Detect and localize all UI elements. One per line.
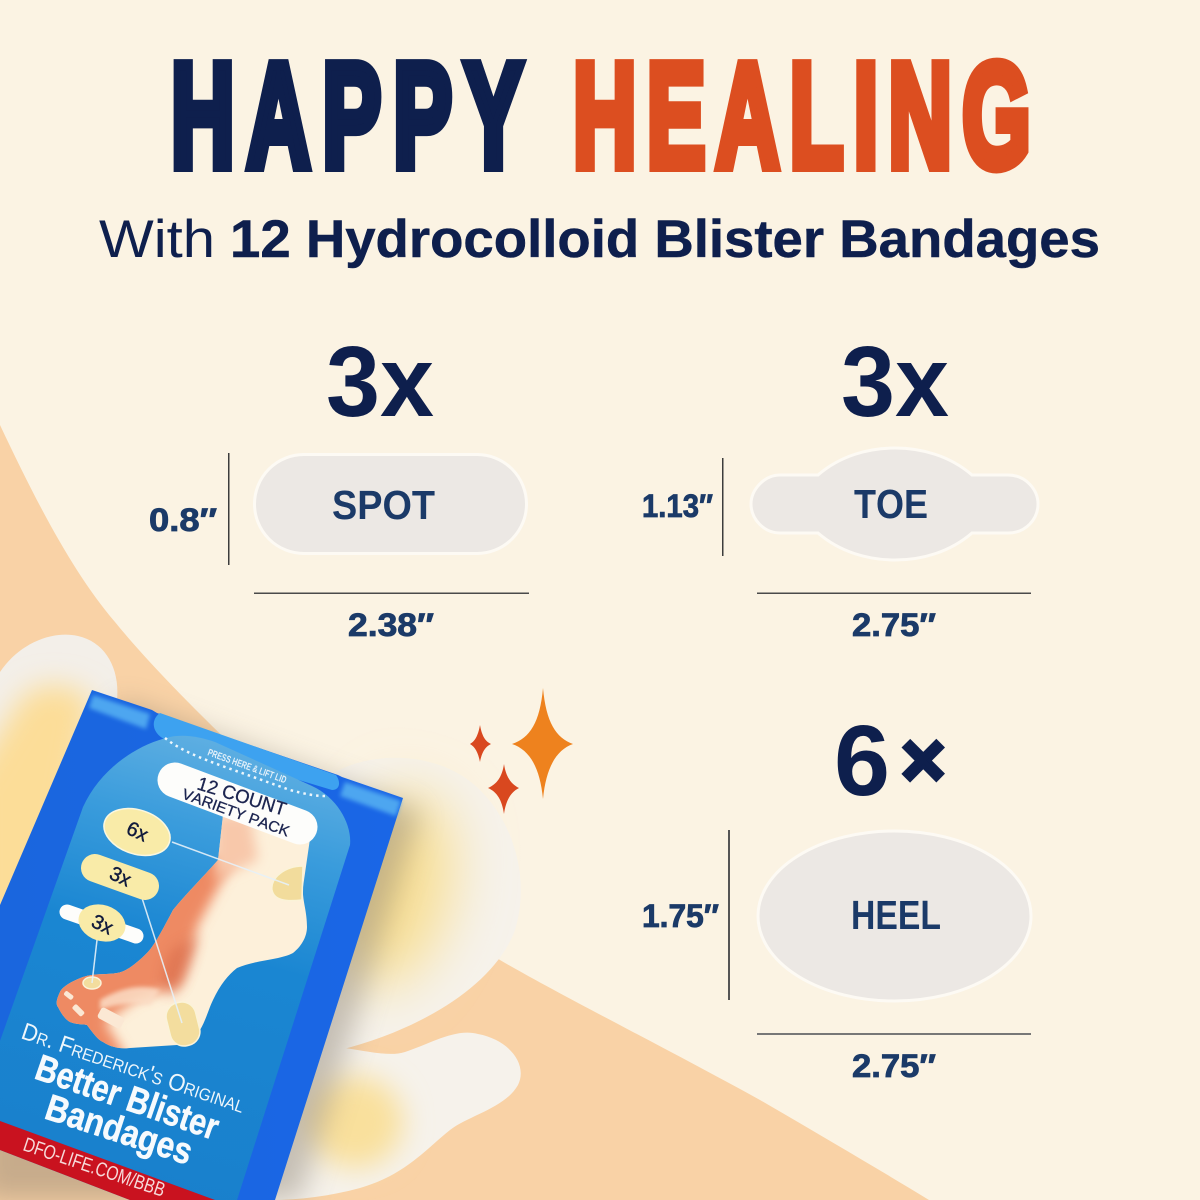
product name line two: Bandages [41,1087,198,1173]
height value: 0.8″ [149,502,217,538]
toe bandage panel [642,326,1038,643]
toe blister pad [83,977,101,989]
toe bandage shape [751,448,1038,560]
sparkles [470,688,573,814]
package body [0,690,403,1200]
photo bandage: toe [270,1033,521,1200]
width line [757,1033,1031,1035]
width value: 2.75″ [852,607,936,643]
width line [254,592,529,594]
ball blister pad [163,999,203,1049]
spot count badge: 3x [106,863,134,891]
spot bandage shape [254,454,526,554]
subtitle: With [99,210,215,269]
lid center tab [154,713,339,790]
height line [228,453,230,565]
quantity 3x: 3x [326,326,434,438]
foot illustration [56,816,310,1048]
lid right band [340,782,401,816]
multiplication sign: × [901,718,945,803]
width line [757,592,1031,594]
lid left band [89,695,150,729]
12 count label pill [175,774,300,840]
product package [0,690,403,1200]
press here text: PRESS HERE & LIFT LID [206,747,288,786]
printed arch panel [0,736,350,1200]
variety pack text: VARIETY PACK [180,786,292,840]
height value: 1.13″ [642,488,713,524]
toe label: TOE [854,481,928,527]
heel label: HEEL [851,892,941,938]
height value: 1.75″ [642,898,719,934]
subtitle: 12 Hydrocolloid Blister Bandages [230,210,1100,269]
heel count badge [98,801,176,863]
height line [722,458,724,556]
heel bandage shape [758,831,1031,1001]
small red sparkle lower [488,764,519,814]
photo bandage: large heel [240,758,521,1050]
title word: HAPPY: HAPPY [171,34,535,198]
heel blister pad [272,866,303,901]
heel bandage panel [642,705,1031,1084]
title [171,34,1041,198]
toe count badge: 3x [88,911,116,939]
spot bandage panel [149,326,529,643]
dotted press line [165,738,325,796]
brand line: Dr. Frederick's Original [18,1018,248,1119]
width value: 2.38″ [348,607,434,643]
leader lines [92,842,289,1023]
toenails [63,990,125,1029]
peach curved background shape [0,425,929,1200]
height line [728,830,730,1000]
foot clipped colouring [56,816,310,1048]
spot count badge [95,863,145,891]
photo bandage: top left [0,635,117,930]
quantity 3x: 3x [841,326,949,438]
heel count badge: 6x [123,818,151,846]
package shadow [0,700,420,1200]
product name line one: Better Blister [30,1047,224,1148]
small red sparkle left [470,725,491,762]
quantity 6: 6 [834,705,890,817]
width value: 2.75″ [852,1048,936,1084]
red footer band [0,1121,215,1200]
spot label: SPOT [332,482,435,528]
12 count text: 12 COUNT [195,774,289,821]
large orange sparkle [512,688,573,799]
toe count badge [67,898,136,948]
